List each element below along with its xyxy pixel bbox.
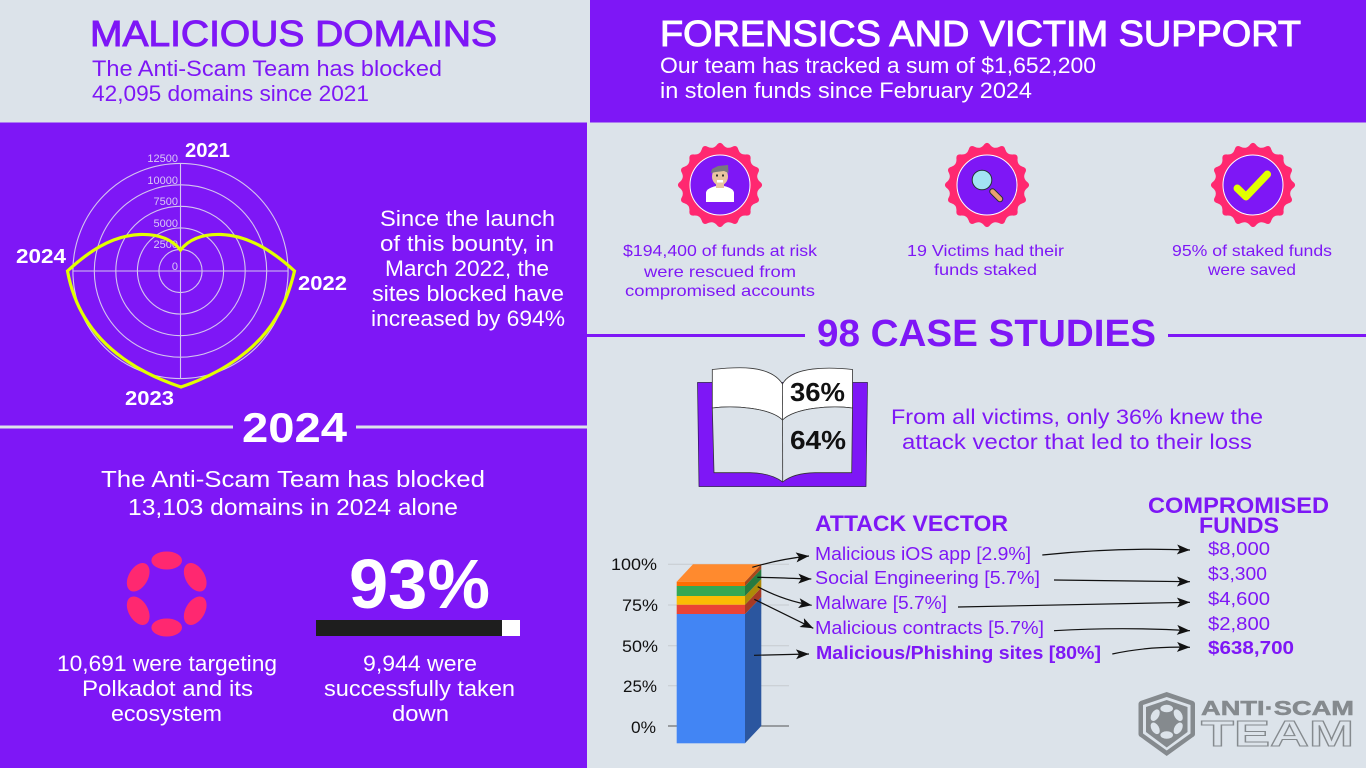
heading: 2024: 2024 — [242, 404, 348, 451]
icon: polkadot logo — [122, 552, 211, 636]
text: bounty increase: Since the launch — [380, 206, 555, 231]
caption: rescued funds: $194,400 of funds at risk — [623, 243, 818, 260]
text: blocked in 2024 — [101, 466, 485, 520]
bar segment: malware — [677, 579, 761, 605]
icon: magnifier badge — [945, 143, 1029, 227]
chart: 3D stacked bar of attack vectors: 75% — [622, 596, 658, 615]
text: blocked domains summary: 42,095 domains since 2021 — [92, 81, 369, 106]
text: bounty increase: of this bounty, in — [380, 231, 554, 256]
logo: anti-scam team — [1138, 692, 1354, 756]
chart: 3D stacked bar of attack vectors: 50% — [622, 637, 658, 656]
text: blocked domains summary — [92, 56, 442, 106]
caption: victims staked — [907, 243, 1065, 279]
caption: rescued funds — [623, 243, 818, 300]
progress bar: 93 percent taken down — [316, 620, 520, 636]
wordmark: team: TEAM — [1201, 713, 1354, 754]
text: attack vector knowledge: From all victims, only 36% knew the — [891, 406, 1263, 429]
text: bounty increase: March 2022, the — [385, 256, 549, 281]
heading: compromised funds: COMPROMISED — [1148, 493, 1329, 518]
arrows: bar segments to attack vectors — [752, 556, 813, 655]
list: attack vectors: Malicious/Phishing sites [80%] — [816, 643, 1101, 663]
chart: polar chart of domains by year: 10000 — [147, 175, 178, 187]
text: blocked domains summary: The Anti-Scam Team has blocked — [92, 56, 442, 81]
list: compromised funds values: $2,800 — [1208, 614, 1270, 634]
chart: 3D stacked bar of attack vectors: 0% — [631, 718, 656, 737]
labels: polar chart years: 2023 — [125, 388, 174, 410]
text: polkadot targeting: ecosystem — [111, 701, 222, 726]
text: taken down: successfully taken — [324, 676, 515, 701]
list: attack vectors: Social Engineering [5.7%] — [815, 568, 1040, 588]
caption: rescued funds: compromised accounts — [625, 283, 815, 300]
chart: 3D stacked bar of attack vectors: 25% — [623, 677, 657, 696]
chart: polar chart of domains by year: 5000 — [154, 218, 178, 230]
line: domains blocked series — [68, 234, 294, 387]
heading: malicious domains: MALICIOUS DOMAINS — [90, 13, 497, 54]
text: attack vector knowledge — [891, 406, 1263, 454]
labels: polar chart years: 2024 — [16, 246, 67, 268]
list: attack vectors — [815, 544, 1101, 663]
heading: compromised funds: FUNDS — [1199, 513, 1279, 538]
icon: shield — [1138, 692, 1195, 756]
icon: check badge — [1211, 143, 1295, 227]
icon: open book with percentages — [698, 368, 868, 486]
text: attack vector knowledge: attack vector that led to their loss — [902, 431, 1252, 454]
panel: malicious domains header — [0, 0, 590, 122]
bar segment: malicious iOS app — [677, 564, 761, 586]
wordmark: anti-scam: ANTI·SCAM — [1201, 698, 1354, 720]
list: attack vectors: Malicious iOS app [2.9%] — [815, 544, 1031, 564]
caption: staked funds saved: were saved — [1207, 262, 1296, 279]
list: compromised funds values: $638,700 — [1208, 638, 1294, 658]
text: polkadot targeting: Polkadot and its — [82, 676, 253, 701]
caption: victims staked: funds staked — [934, 262, 1037, 279]
chart: polar chart of domains by year — [16, 140, 347, 410]
text: stolen funds summary: in stolen funds since February 2024 — [660, 78, 1032, 103]
heading: attack vector: ATTACK VECTOR — [815, 511, 1008, 536]
caption: rescued funds: were rescued from — [643, 264, 796, 281]
arrows: attack vectors to funds — [958, 549, 1190, 654]
text: bounty increase: sites blocked have — [372, 281, 564, 306]
caption: staked funds saved — [1172, 243, 1332, 279]
text: blocked in 2024: The Anti-Scam Team has blocked — [101, 466, 485, 492]
chart: polar chart of domains by year: 7500 — [154, 196, 178, 208]
icon: person badge — [678, 143, 762, 227]
text: bounty increase — [371, 206, 565, 331]
heading: 98 case studies: 98 CASE STUDIES — [817, 313, 1156, 355]
bar segment: social engineering — [677, 569, 761, 596]
labels: polar chart years: 2021 — [185, 140, 230, 162]
text: polkadot targeting: 10,691 were targeting — [57, 651, 277, 676]
text: bounty increase: increased by 694% — [371, 306, 565, 331]
text: taken down — [324, 651, 515, 726]
caption: victims staked: 19 Victims had their — [907, 243, 1065, 260]
text: polkadot targeting — [57, 651, 277, 726]
stat: 93 percent: 93% — [349, 545, 490, 623]
chart: polar chart of domains by year: 2500 — [154, 239, 178, 251]
text: taken down: 9,944 were — [363, 651, 477, 676]
label: 36 percent: 36% — [790, 377, 845, 407]
panel: left purple column — [0, 122, 587, 768]
list: compromised funds values: $8,000 — [1208, 539, 1270, 559]
text: stolen funds summary: Our team has tracked a sum of $1,652,200 — [660, 53, 1096, 78]
heading: compromised funds — [1148, 493, 1329, 538]
list: compromised funds values: $4,600 — [1208, 589, 1270, 609]
caption: staked funds saved: 95% of staked funds — [1172, 243, 1332, 260]
text: blocked in 2024: 13,103 domains in 2024 alone — [128, 494, 458, 520]
labels: polar chart years — [16, 140, 347, 410]
bar segment: malicious contracts — [677, 588, 761, 614]
text: taken down: down — [392, 701, 449, 726]
chart: polar chart of domains by year: 12500 — [147, 153, 178, 165]
bar segment: phishing sites — [677, 597, 761, 743]
chart: 3D stacked bar of attack vectors — [611, 555, 789, 743]
list: compromised funds values: $3,300 — [1208, 564, 1267, 584]
list: attack vectors: Malicious contracts [5.7%] — [815, 618, 1044, 638]
chart: 3D stacked bar of attack vectors: 100% — [611, 555, 657, 574]
labels: polar chart years: 2022 — [298, 273, 347, 295]
heading: forensics and victim support: FORENSICS AND VICTIM SUPPORT — [660, 13, 1301, 54]
chart: polar chart of domains by year: 0 — [172, 261, 178, 273]
label: 64 percent: 64% — [790, 425, 846, 455]
panel: forensics header — [590, 0, 1366, 122]
list: compromised funds values — [1208, 539, 1294, 658]
list: attack vectors: Malware [5.7%] — [815, 593, 947, 613]
text: stolen funds summary — [660, 53, 1096, 103]
